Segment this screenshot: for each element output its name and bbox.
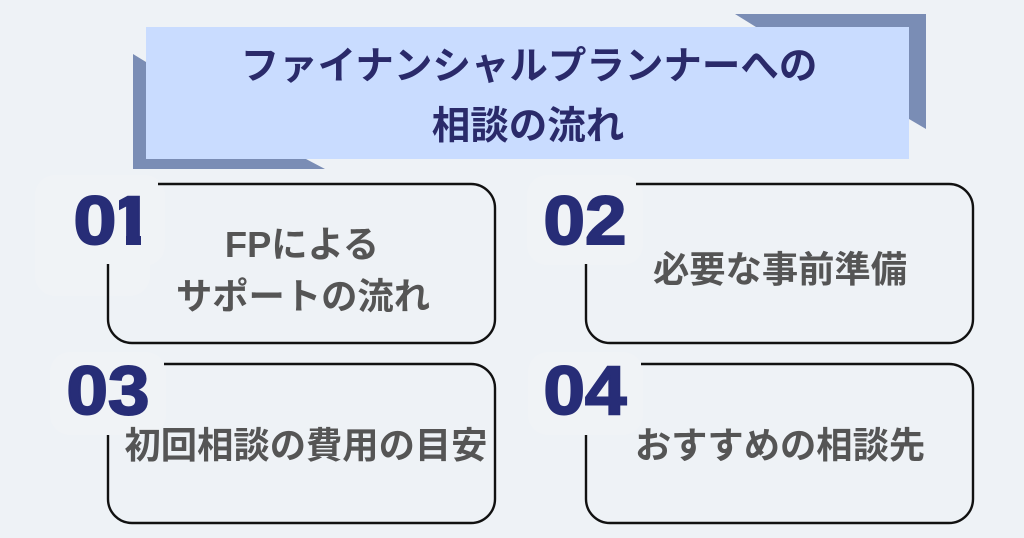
- card 01 label: [176, 224, 430, 317]
- title banner: [133, 14, 926, 169]
- card 04 number: 04: [544, 353, 626, 429]
- card 04 label: おすすめの相談先: [635, 425, 925, 466]
- card 01 number backing: [35, 175, 165, 296]
- card 03 outline: [108, 364, 495, 523]
- card 04: [528, 352, 973, 523]
- card 01 label: サポートの流れ: [176, 276, 430, 317]
- card 04 number backing: [528, 352, 643, 435]
- card 01 outline: [108, 184, 495, 343]
- title text: [241, 45, 817, 148]
- card 03: [50, 352, 495, 523]
- card 03 number: 03: [67, 353, 149, 429]
- title text: 相談の流れ: [432, 105, 624, 148]
- card 04 outline: [586, 364, 973, 523]
- card 03 label: 初回相談の費用の目安: [125, 425, 487, 466]
- banner accent: lower left: [133, 54, 325, 169]
- banner accent: upper right: [735, 14, 926, 129]
- card 01 number: 1: [108, 182, 154, 259]
- card 01: [75, 182, 496, 344]
- card 02 number: 02: [544, 183, 626, 259]
- card 02 number backing: [527, 175, 643, 265]
- card 03 number backing: [50, 352, 166, 435]
- card 02: [527, 175, 973, 343]
- card 02 outline: [586, 184, 973, 343]
- card 01 label: FPによる: [225, 224, 379, 265]
- card 02 label: 必要な事前準備: [653, 249, 907, 290]
- title text: ファイナンシャルプランナーへの: [241, 45, 817, 88]
- card 01 number: 0: [74, 182, 116, 259]
- banner panel: [146, 27, 909, 159]
- card 01 number: [75, 195, 141, 246]
